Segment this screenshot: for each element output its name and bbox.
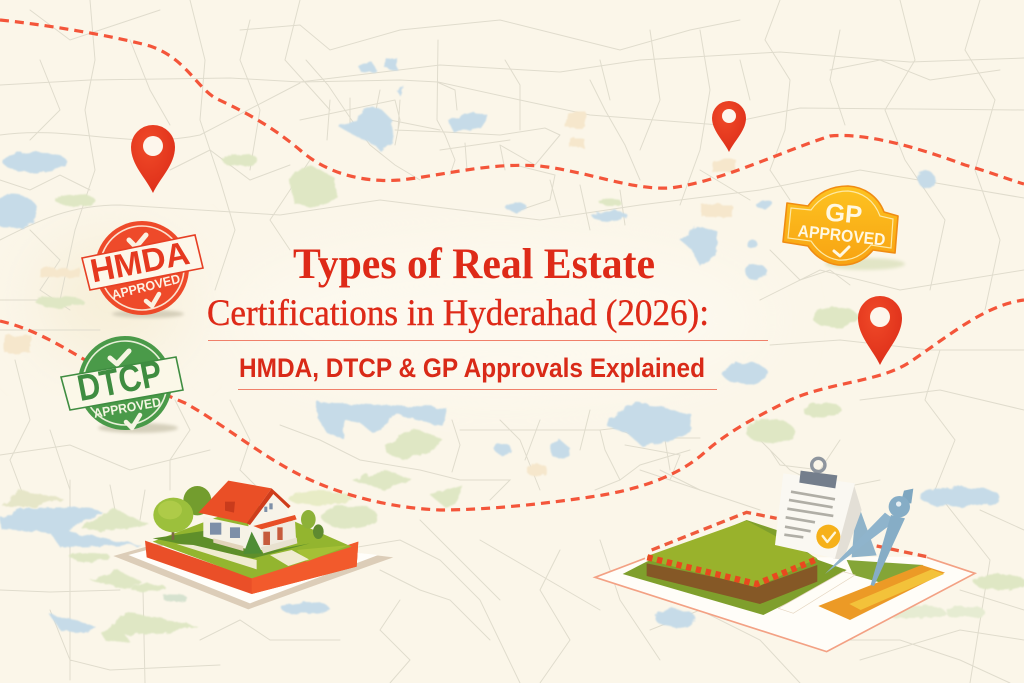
- windows: [210, 503, 273, 538]
- house walls: [203, 517, 250, 550]
- green patches: [3, 154, 1024, 642]
- building patches: [5, 112, 736, 476]
- title line 1: Types of Real Estate: [293, 241, 655, 288]
- sheet outline: [595, 557, 975, 652]
- porch: [253, 515, 297, 529]
- GP approved badge: [783, 186, 905, 270]
- clipboard stand: [852, 500, 877, 557]
- garden paths: [177, 544, 257, 569]
- illustration: house on plot: [113, 481, 393, 609]
- location pin: left: [131, 125, 175, 193]
- HMDA approved stamp: APPROVED: [110, 271, 182, 302]
- location pin: right: [858, 296, 902, 365]
- DTCP approved stamp: APPROVED: [92, 394, 162, 421]
- trees: [153, 486, 324, 540]
- DTCP approved stamp: [61, 336, 183, 433]
- clipboard sheet: [775, 473, 855, 558]
- dashed route: upper: [0, 20, 1024, 188]
- soil block sides: [145, 541, 358, 594]
- base plate: [113, 533, 393, 609]
- dashed boundary: [652, 512, 927, 557]
- illustration: plot with clipboard and compass: [595, 458, 975, 652]
- lawn: [153, 503, 352, 578]
- grass plot: [623, 520, 847, 615]
- HMDA approved stamp: [82, 221, 203, 318]
- DTCP approved stamp: DTCP: [74, 352, 165, 409]
- GP approved badge: GP: [824, 198, 863, 230]
- compass: [825, 489, 913, 586]
- shrub: [243, 532, 263, 554]
- divider lower: [238, 388, 717, 390]
- title panel: [207, 241, 768, 390]
- plot top: [647, 521, 817, 587]
- plot soil: [647, 563, 817, 604]
- check badge: [816, 525, 840, 549]
- ruler: [849, 569, 944, 610]
- clip: [812, 458, 825, 472]
- location pin: top centre: [712, 101, 746, 152]
- GP approved badge: APPROVED: [797, 221, 886, 250]
- roof: [198, 481, 272, 523]
- dashed route: lower: [0, 300, 1024, 510]
- survey sheet: [595, 557, 975, 652]
- sheet lines: [784, 492, 835, 537]
- subtitle: HMDA, DTCP & GP Approvals Explained: [239, 353, 705, 383]
- divider upper: [208, 340, 768, 342]
- ruler base: [818, 565, 945, 620]
- title line 2: Certifications in Hyderahad (2026):: [207, 293, 709, 334]
- white road: [778, 572, 855, 613]
- red fence: [647, 557, 817, 584]
- HMDA approved stamp: HMDA: [87, 234, 192, 289]
